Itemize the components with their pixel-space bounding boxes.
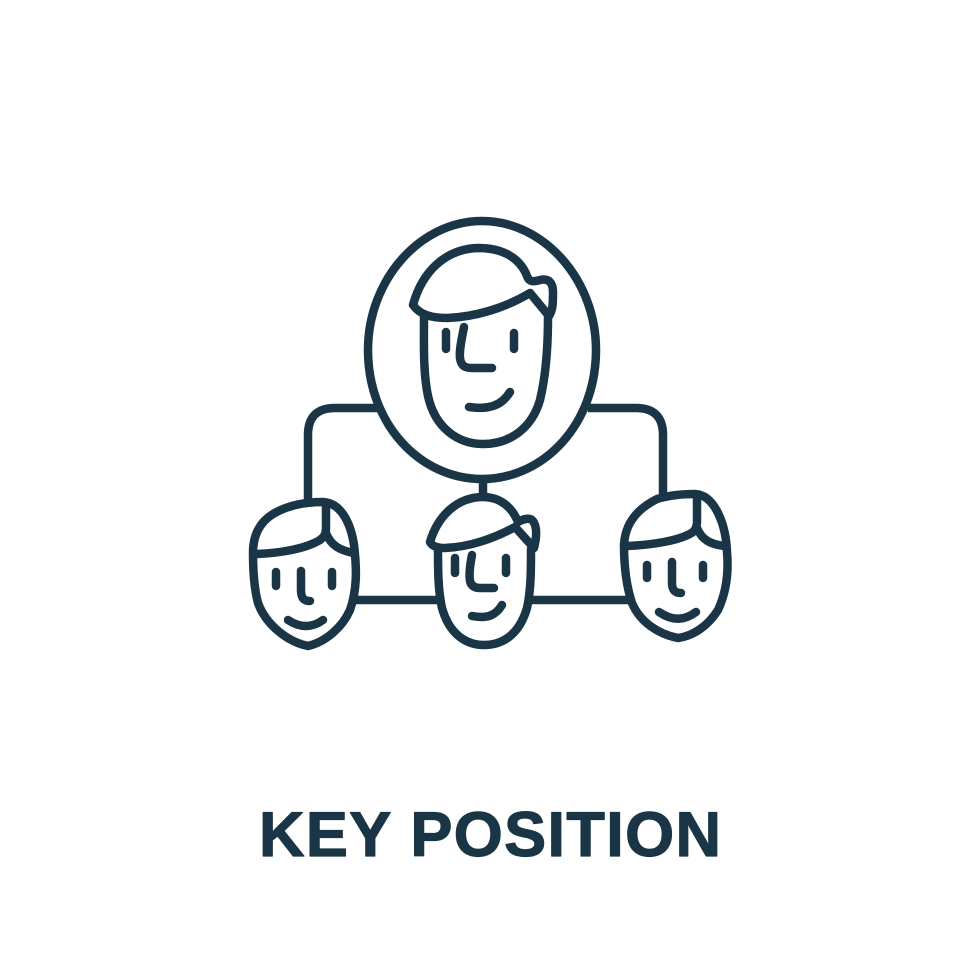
circle frame xyxy=(368,221,596,479)
icon: key person in circle xyxy=(368,221,596,479)
face outline xyxy=(438,548,531,645)
head outline xyxy=(253,502,356,646)
connector lines xyxy=(308,408,663,600)
head outline xyxy=(624,494,728,638)
left eye xyxy=(442,332,450,349)
mouth xyxy=(472,605,502,617)
hair xyxy=(430,497,536,548)
icon: right team member xyxy=(624,494,728,638)
mouth xyxy=(469,392,510,408)
face outline xyxy=(424,317,548,444)
nose xyxy=(672,562,681,593)
right eye xyxy=(510,333,518,349)
hair xyxy=(257,505,353,554)
right eye xyxy=(699,565,707,578)
icon: left team member xyxy=(253,502,356,646)
left eye xyxy=(643,565,651,578)
nose xyxy=(301,571,310,601)
left eye xyxy=(272,572,280,586)
icon: key position hierarchy xyxy=(253,221,728,646)
hair xyxy=(413,248,553,318)
hair xyxy=(627,497,724,546)
title: KEY POSITION xyxy=(259,800,721,870)
right eye xyxy=(328,572,336,586)
icon: centre team member xyxy=(430,497,536,645)
mouth xyxy=(659,612,696,619)
mouth xyxy=(288,620,323,626)
nose xyxy=(470,555,494,588)
left eye xyxy=(451,558,459,573)
nose xyxy=(460,327,492,368)
right eye xyxy=(502,558,510,573)
